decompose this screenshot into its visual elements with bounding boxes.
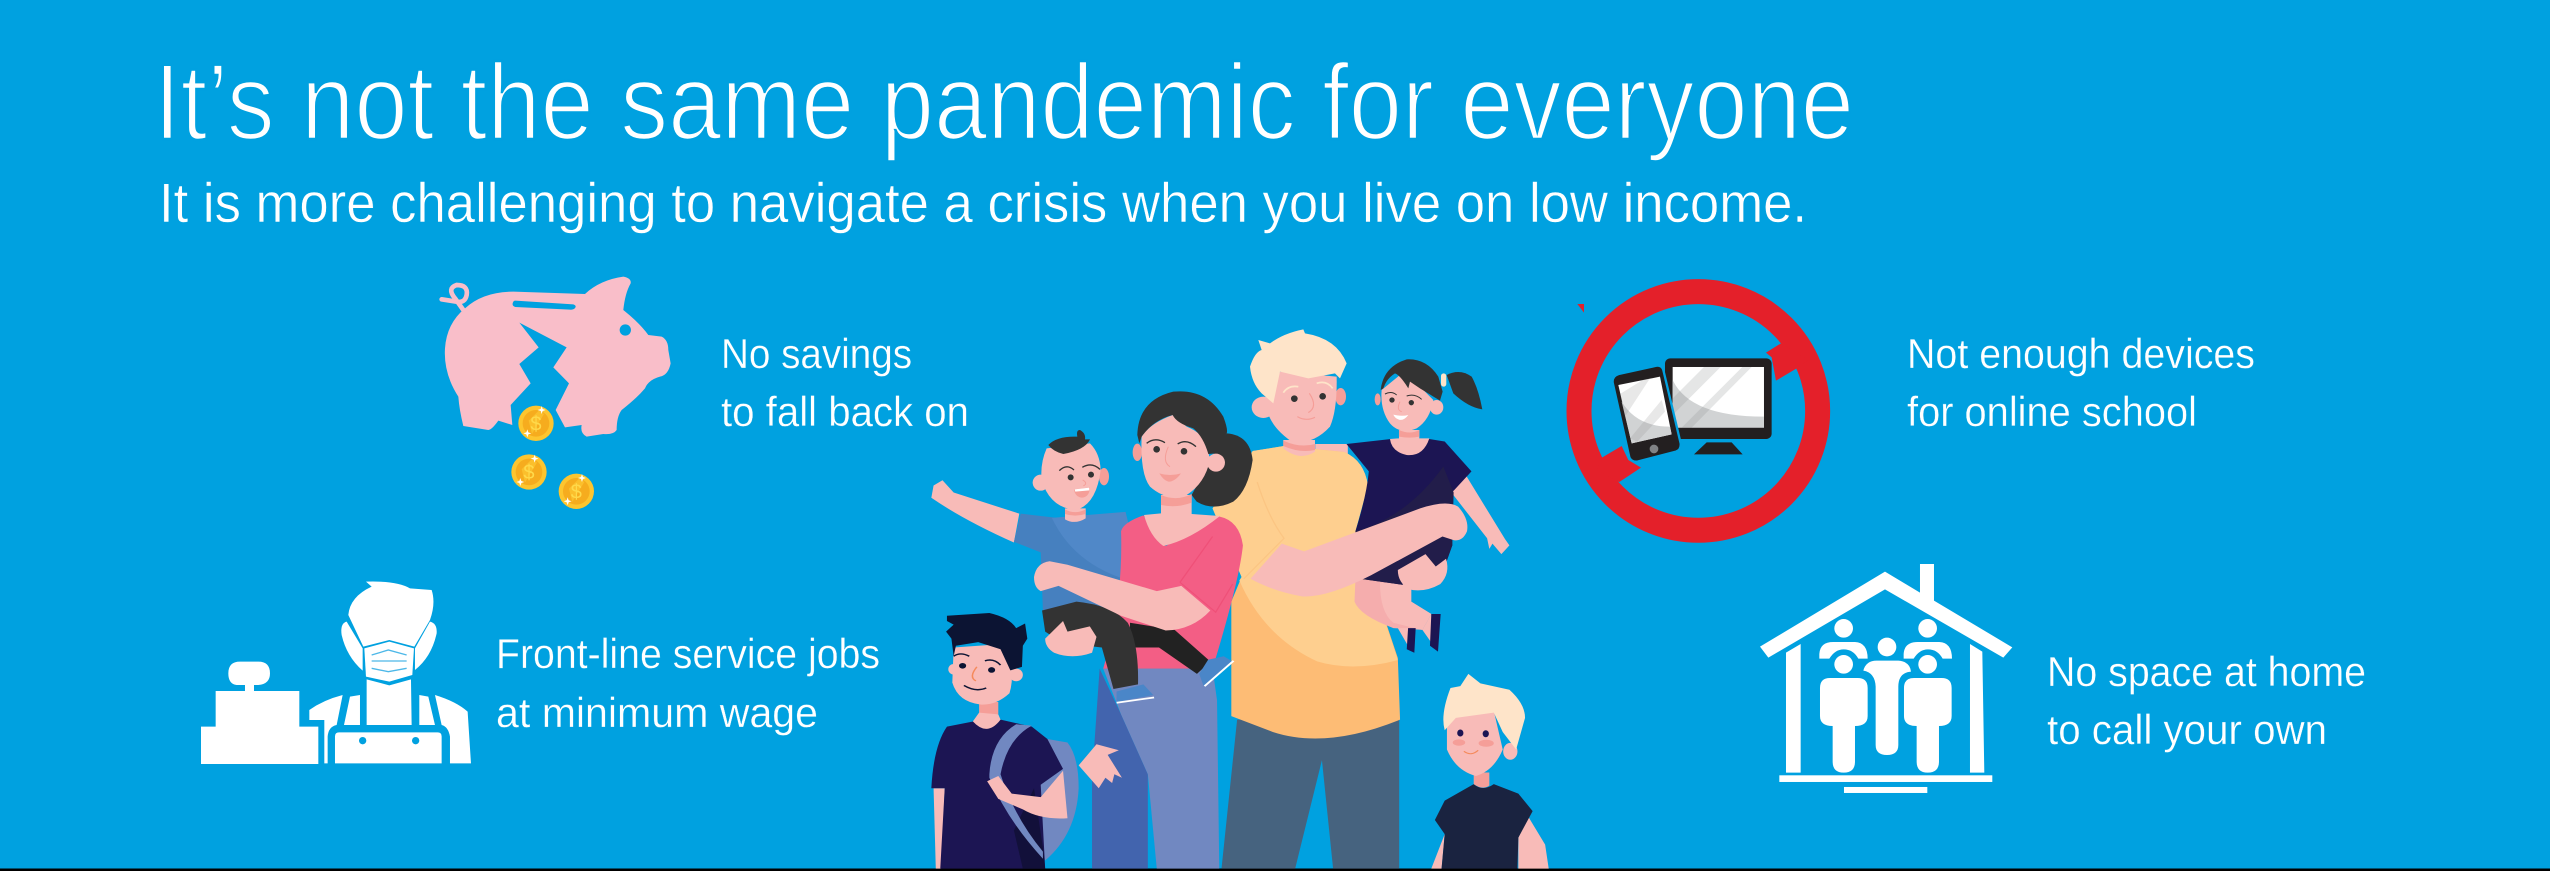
toddler and mother heads xyxy=(1033,391,1253,546)
icon: gold coin xyxy=(511,454,547,490)
icon: gold coin: $ xyxy=(571,481,582,503)
label: not enough devices xyxy=(1907,330,2255,435)
label: no space at home: No space at home xyxy=(2047,648,2366,695)
boy with backpack xyxy=(931,613,1079,869)
label: no savings xyxy=(721,330,969,435)
label: not enough devices: for online school xyxy=(1907,388,2197,435)
girl body xyxy=(1346,439,1509,653)
family illustration xyxy=(931,329,1549,869)
girl head xyxy=(1375,359,1482,455)
toddler head xyxy=(1033,430,1109,522)
panel: no savings xyxy=(442,277,969,509)
label: front-line jobs xyxy=(496,630,880,736)
father's arm around girl xyxy=(1251,503,1467,597)
label: front-line jobs: Front-line service jobs xyxy=(496,630,880,677)
icon: gold coin: $ xyxy=(523,462,535,484)
icon: gold coin xyxy=(518,406,554,441)
family bodies xyxy=(931,439,1549,869)
father head xyxy=(1250,329,1347,456)
label: no savings: No savings xyxy=(721,330,912,377)
icon: crowded house xyxy=(1760,564,2012,793)
label: no space at home xyxy=(2047,648,2366,753)
icon: prohibited devices xyxy=(1577,292,1818,530)
mother head xyxy=(1133,391,1253,546)
label: no savings: to fall back on xyxy=(721,388,969,435)
small blond boy xyxy=(1431,674,1549,869)
father and girl heads xyxy=(1250,329,1482,456)
toddler torso xyxy=(931,480,1143,610)
panel: no space at home xyxy=(1760,564,2366,793)
label: not enough devices: Not enough devices xyxy=(1907,330,2255,377)
phone xyxy=(1613,366,1681,462)
label: no space at home: to call your own xyxy=(2047,706,2327,753)
title: It’s not the same pandemic for everyone xyxy=(154,41,1854,162)
label: front-line jobs: at minimum wage xyxy=(496,689,818,736)
icon: gold coin xyxy=(559,474,594,509)
monitor xyxy=(1665,358,1772,454)
father body xyxy=(1213,444,1400,869)
icon: broken piggy bank xyxy=(442,277,671,509)
panel: not enough devices xyxy=(1577,292,2255,530)
icon: gold coin: $ xyxy=(530,413,542,435)
panel: front-line jobs xyxy=(201,582,880,764)
subtitle: It is more challenging to navigate a crisis when you live on low income. xyxy=(159,171,1807,234)
icon: masked cashier and register xyxy=(201,582,471,764)
mother body xyxy=(1079,515,1243,869)
toddler legs and mother's arm xyxy=(1034,561,1234,703)
bottom black rule xyxy=(0,868,2550,871)
